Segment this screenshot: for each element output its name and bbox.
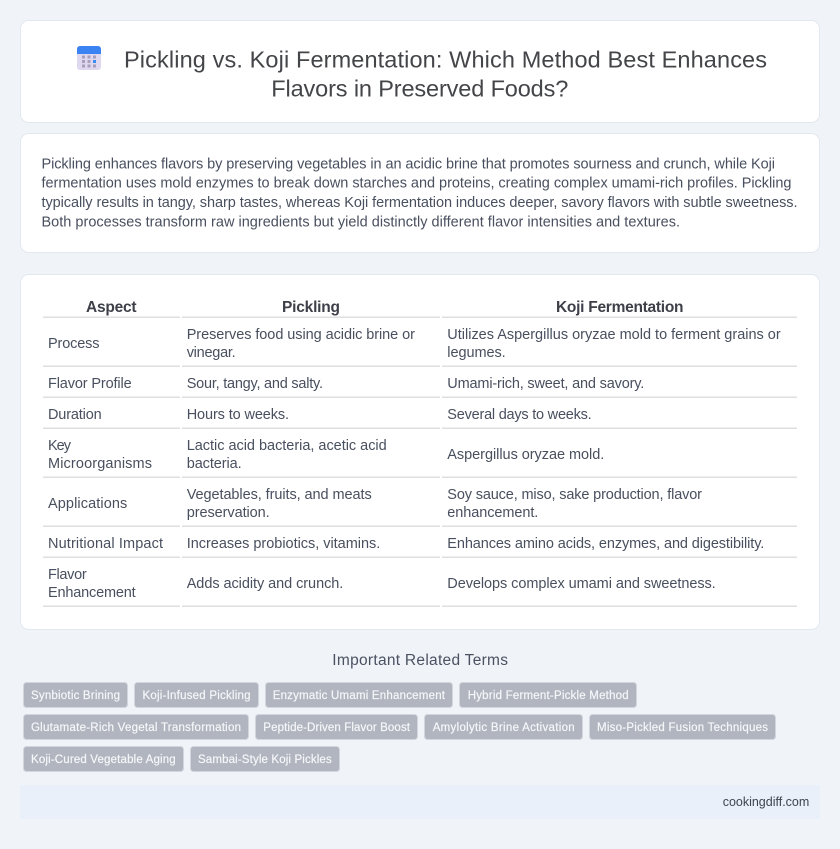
chip: Glutamate-Rich Vegetal Transformation [31, 722, 241, 734]
table header [86, 299, 684, 316]
table header: Aspect [86, 299, 136, 316]
heading: related terms: Important Related Terms [332, 652, 508, 669]
chip: Synbiotic Brining [31, 690, 120, 702]
chip: Koji-Cured Vegetable Aging [31, 754, 176, 766]
footer [20, 785, 820, 819]
row: process: Preserves food using acidic brine or [187, 327, 415, 343]
text block: summary: typically results in tangy, sharp tastes, whereas Koji fermentation induces deeper, savory flavors with subtle sweetness. [42, 195, 798, 211]
text block: summary: Both processes transform raw ingredients but yield distinctly different flavor intensities and textures. [42, 214, 680, 230]
chip [134, 682, 258, 708]
chip [190, 746, 340, 772]
row: flavor profile: Sour, tangy, and salty. [187, 376, 323, 392]
chip [256, 714, 418, 740]
row: flavor profile: Flavor Profile [48, 376, 132, 392]
row: duration: Duration [48, 407, 102, 423]
chip [24, 682, 128, 708]
chip: Peptide-Driven Flavor Boost [263, 722, 411, 734]
row: duration: Several days to weeks. [447, 407, 592, 423]
text block: summary: Pickling enhances flavors by preserving vegetables in an acidic brine that promotes sourness and crunch, while Koji [42, 156, 775, 172]
text block: summary [42, 156, 798, 230]
row: flavor enhancement: Enhancement [48, 585, 136, 601]
row: process: Utilizes Aspergillus oryzae mold to ferment grains or [447, 327, 781, 343]
row: flavor profile [48, 376, 644, 392]
text block: summary: fermentation uses mold enzymes to break down starches and proteins, creating complex umami-rich profiles. Pickling [42, 176, 792, 192]
row: key microorganisms: Lactic acid bacteria, acetic acid [187, 438, 387, 454]
row: applications [48, 487, 702, 521]
row: key microorganisms [48, 438, 604, 472]
title: Flavors in Preserved Foods? [271, 76, 568, 102]
row: key microorganisms: bacteria. [187, 456, 242, 472]
row: nutritional impact: Enhances amino acids, enzymes, and digestibility. [447, 536, 764, 552]
row: applications: Applications [48, 496, 127, 512]
panel: title card [20, 20, 820, 122]
row: applications: Vegetables, fruits, and meats [187, 487, 372, 503]
row: flavor enhancement: Develops complex umami and sweetness. [447, 576, 716, 592]
row: key microorganisms: Key [48, 438, 72, 454]
chip: Amylolytic Brine Activation [433, 722, 575, 734]
row: duration [48, 407, 592, 423]
row: process: vinegar. [187, 345, 236, 361]
chip [24, 746, 184, 772]
row: flavor enhancement: Adds acidity and crunch. [187, 576, 343, 592]
icon: calendar [77, 46, 101, 70]
row: nutritional impact: Nutritional Impact [48, 536, 163, 552]
row: process: Process [48, 336, 100, 352]
chip [590, 714, 776, 740]
title [124, 46, 767, 102]
chip: Koji-Infused Pickling [142, 690, 250, 702]
row: nutritional impact [48, 536, 764, 552]
row: nutritional impact: Increases probiotics, vitamins. [187, 536, 380, 552]
row: key microorganisms: Microorganisms [48, 456, 152, 472]
chip [24, 714, 248, 740]
chip: Hybrid Ferment-Pickle Method [468, 690, 629, 702]
chip: Enzymatic Umami Enhancement [273, 690, 446, 702]
chip: Sambai-Style Koji Pickles [198, 754, 332, 766]
chip: Miso-Pickled Fusion Techniques [597, 722, 768, 734]
row: flavor enhancement: Flavor [48, 567, 87, 583]
row: flavor enhancement [48, 567, 716, 601]
row: applications: Soy sauce, miso, sake production, flavor [447, 487, 702, 503]
row: applications: enhancement. [447, 505, 538, 521]
chip [460, 682, 636, 708]
row: process [48, 327, 781, 361]
row: applications: preservation. [187, 505, 270, 521]
footer: cookingdiff.com [723, 795, 809, 809]
row: duration: Hours to weeks. [187, 407, 289, 423]
related term chips [24, 682, 776, 772]
chip [424, 714, 582, 740]
table header: Pickling [282, 299, 340, 316]
row: key microorganisms: Aspergillus oryzae mold. [447, 447, 604, 463]
table header: Koji Fermentation [556, 299, 684, 316]
row: process: legumes. [447, 345, 506, 361]
panel: comparison table [20, 274, 820, 630]
title: Pickling vs. Koji Fermentation: Which Method Best Enhances [124, 46, 767, 72]
panel: summary card [20, 134, 820, 252]
chip [266, 682, 452, 708]
row: flavor profile: Umami-rich, sweet, and savory. [447, 376, 644, 392]
